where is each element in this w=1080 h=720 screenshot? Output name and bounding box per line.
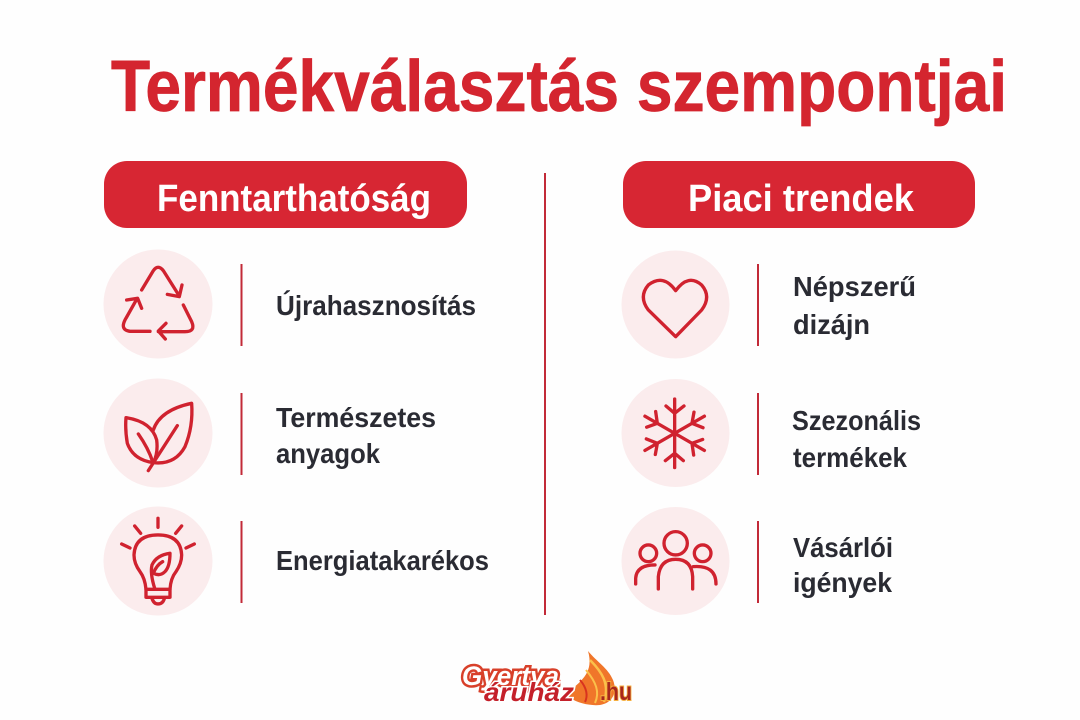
icon: recycle	[123, 267, 193, 339]
item: Energiatakarékos	[104, 506, 489, 616]
logo text: Gyertya: Gyertya	[462, 661, 559, 691]
heading pill: Fenntarthatóság	[104, 161, 467, 228]
icon: light bulb with leaf	[122, 518, 194, 604]
heading pill: Fenntarthatóság: Fenntarthatóság	[157, 178, 431, 220]
item: Természetes anyagok: anyagok	[276, 438, 380, 469]
item: Vásárlói igények	[622, 507, 893, 615]
logo text: áruház: áruház	[484, 677, 574, 707]
icon: leaves	[126, 403, 192, 471]
item: Népszerű dizájn: dizájn	[793, 309, 870, 340]
panel: Piaci trendek	[622, 161, 975, 615]
item: Népszerű dizájn	[622, 250, 916, 358]
item: Természetes anyagok	[104, 378, 436, 488]
center divider	[544, 173, 546, 615]
item: Újrahasznosítás: Újrahasznosítás	[276, 290, 476, 321]
item: Szezonális termékek: Szezonális	[792, 405, 921, 436]
icon: heart	[643, 280, 707, 337]
item: Szezonális termékek	[622, 379, 921, 487]
icon: people	[636, 532, 716, 589]
logo: Gyertya áruház .hu	[462, 651, 632, 707]
item: Természetes anyagok: Természetes	[276, 402, 436, 433]
item: Újrahasznosítás	[104, 250, 476, 358]
item: Energiatakarékos: Energiatakarékos	[276, 545, 489, 576]
panel: Fenntarthatóság	[104, 161, 489, 616]
heading pill: Piaci trendek	[623, 161, 975, 228]
icon: flame	[568, 651, 615, 705]
item: Vásárlói igények: igények	[793, 567, 892, 598]
item: Vásárlói igények: Vásárlói	[793, 532, 893, 563]
item: Szezonális termékek: termékek	[793, 442, 907, 473]
heading pill: Piaci trendek: Piaci trendek	[688, 178, 915, 220]
icon: snowflake	[640, 399, 709, 468]
item: Népszerű dizájn: Népszerű	[793, 271, 916, 302]
logo text: .hu: .hu	[600, 678, 632, 706]
